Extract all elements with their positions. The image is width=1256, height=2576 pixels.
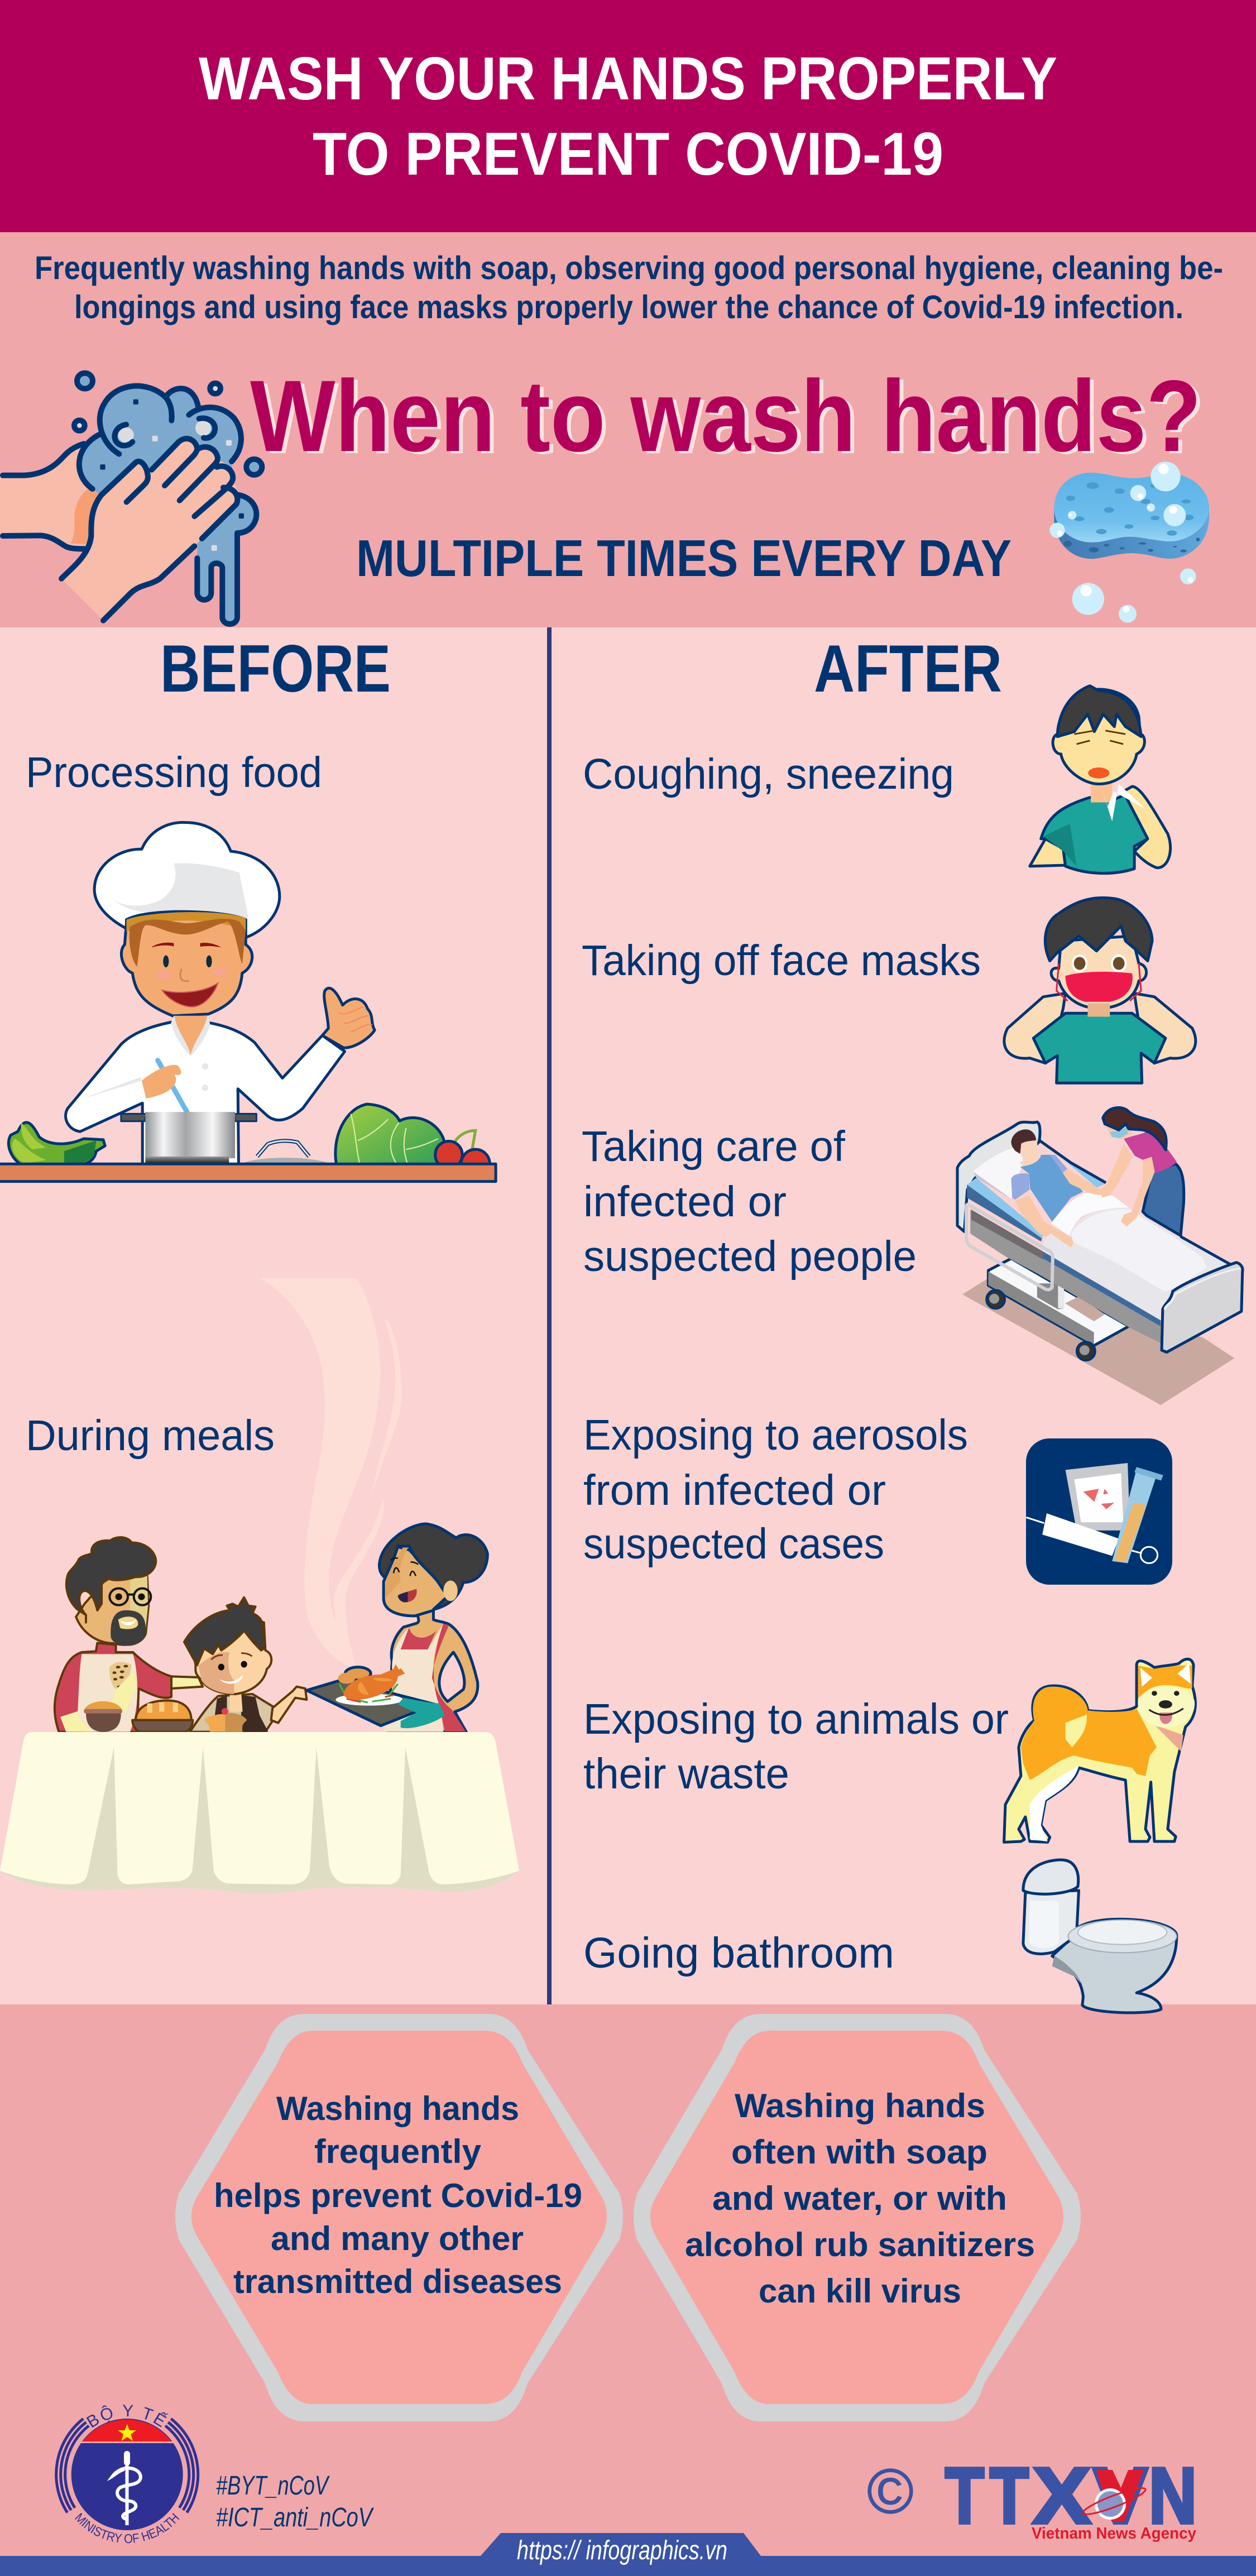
logo: vietnam news agency: Vietnam News Agency <box>1032 2525 1196 2543</box>
panel: before and after <box>0 627 1256 2004</box>
illustration: coughing boy <box>1030 686 1171 874</box>
illustration: dog <box>1004 1659 1195 1842</box>
callout: hexagon left: and many other <box>271 2220 524 2257</box>
logo: ministry of health: BỘ Y TẾ <box>86 2405 169 2428</box>
icon: lab items <box>1026 1463 1163 1563</box>
hashtags: #BYT_nCoV <box>216 2471 330 2501</box>
label: taking care: infected or <box>583 1178 787 1226</box>
illustration: boy taking off mask <box>1004 898 1196 1083</box>
title: TO PREVENT COVID-19 <box>313 120 943 188</box>
illustration: family at the table <box>0 1278 519 1893</box>
table with cloth <box>0 1732 519 1893</box>
divider between columns <box>547 627 552 2004</box>
callout: hexagon right: and water, or with <box>712 2180 1007 2217</box>
panel: bottom band <box>0 2004 1256 2576</box>
title: WASH YOUR HANDS PROPERLY <box>199 45 1057 113</box>
label: animals <box>583 1695 1009 1798</box>
figure: mother with tray <box>306 1524 487 1732</box>
label: animals: their waste <box>583 1750 789 1798</box>
figure: boy <box>184 1598 306 1732</box>
header banner <box>0 0 1256 232</box>
logo: vietnam news agency: V <box>1093 2452 1148 2540</box>
callout: hexagon right: can kill virus <box>759 2272 961 2310</box>
subheading: MULTIPLE TIMES EVERY DAY <box>356 529 1011 587</box>
callout: hexagon left <box>175 2014 623 2421</box>
heading: after: AFTER <box>814 631 1002 706</box>
logo: vietnam news agency: T <box>990 2452 1029 2540</box>
illustration: caregiver and patient in hospital bed <box>957 1107 1243 1405</box>
label: taking care: suspected people <box>583 1232 917 1280</box>
label: aerosols <box>583 1411 968 1568</box>
intro text <box>35 250 1223 325</box>
figure: father <box>55 1537 203 1732</box>
footer bar: https:// infographics.vn <box>517 2536 727 2565</box>
heading: before: BEFORE <box>160 631 391 706</box>
logo: vietnam news agency: X <box>1033 2452 1091 2540</box>
callout: hexagon right: Washing hands <box>735 2087 985 2124</box>
callout: hexagon left: transmitted diseases <box>233 2263 562 2300</box>
logo: vietnam news agency <box>945 2452 1197 2543</box>
illustration: toilet <box>1023 1860 1177 2013</box>
icon: sponge with bubbles <box>1049 462 1209 623</box>
callout: hexagon left: helps prevent Covid-19 <box>214 2177 582 2214</box>
label: coughing: Coughing, sneezing <box>583 750 954 798</box>
illustration: chef cooking <box>0 822 496 1182</box>
logo: vietnam news agency: N <box>1149 2452 1197 2540</box>
title <box>199 45 1057 188</box>
logo: vietnam news agency: T <box>945 2452 984 2540</box>
hashtags <box>216 2471 374 2532</box>
label: during meals: During meals <box>26 1412 275 1460</box>
label: processing food: Processing food <box>26 749 322 797</box>
callout: hexagon right: alcohol rub sanitizers <box>685 2226 1035 2263</box>
label: bathroom: Going bathroom <box>583 1929 894 1977</box>
label: aerosols: from infected or <box>583 1466 886 1514</box>
after list labels <box>582 750 1009 1977</box>
label: taking care: Taking care of <box>582 1122 846 1171</box>
callout: hexagon left: Washing hands <box>276 2090 519 2127</box>
steam <box>260 1278 402 1668</box>
label: face masks: Taking off face masks <box>582 937 981 985</box>
footer bar <box>0 2533 1256 2576</box>
logo: ministry of health <box>55 2405 200 2543</box>
callout: hexagon right: often with soap <box>731 2133 987 2171</box>
hashtags: #ICT_anti_nCoV <box>216 2503 374 2532</box>
label: taking care <box>582 1122 917 1280</box>
callout: hexagon left: frequently <box>314 2133 482 2170</box>
label: aerosols: Exposing to aerosols <box>583 1411 968 1459</box>
icon: washing hands <box>0 373 262 624</box>
background: middle pink band <box>0 232 1256 627</box>
icon: aerosol samples <box>1026 1438 1172 1585</box>
logo: ministry of health: MINISTRY OF HEALTH <box>75 2513 180 2543</box>
callout: hexagon right <box>634 2014 1081 2421</box>
label: aerosols: suspected cases <box>583 1520 884 1568</box>
copyright symbol: © <box>867 2456 914 2526</box>
label: animals: Exposing to animals or <box>583 1695 1009 1743</box>
